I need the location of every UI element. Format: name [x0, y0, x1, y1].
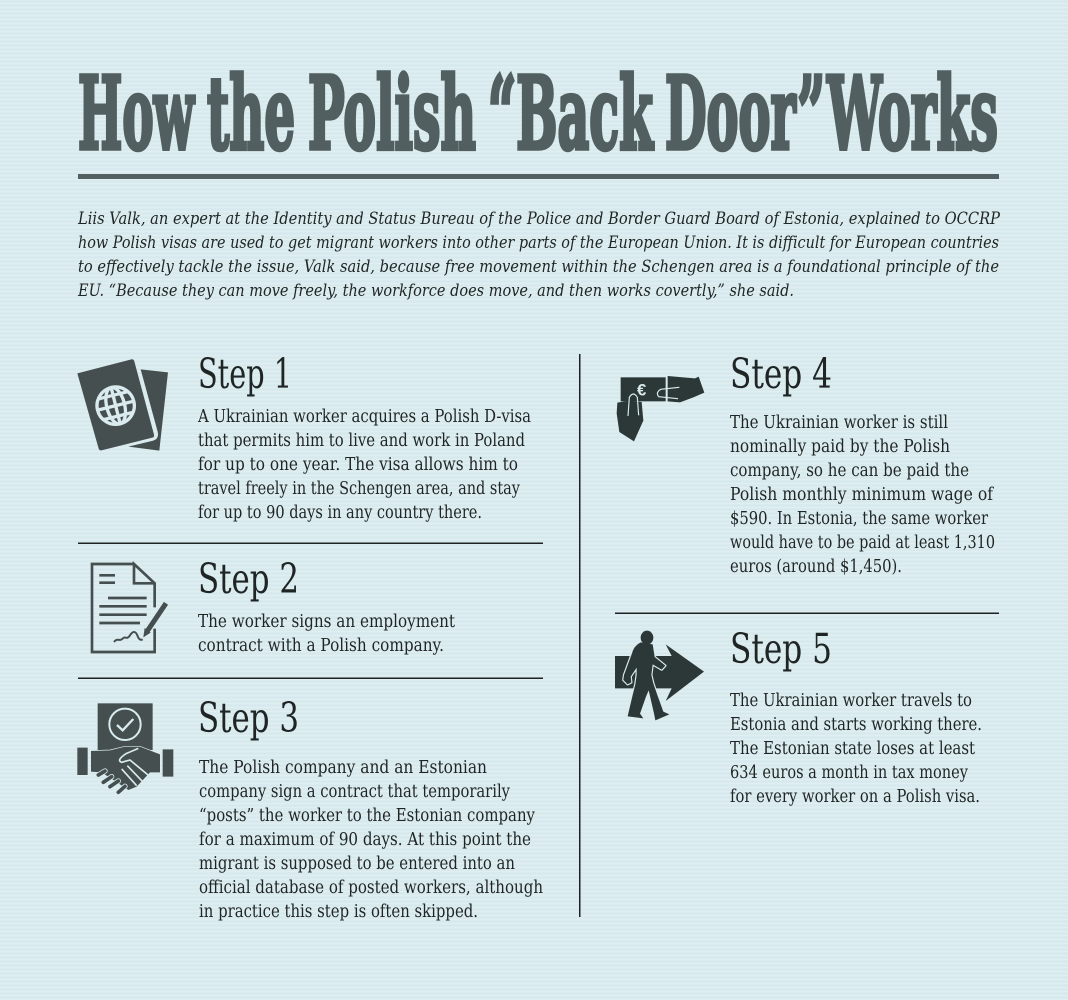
step 3: The Polish company and an Estonian: [199, 758, 487, 778]
icon: passport: [77, 359, 168, 451]
icon: person walking past arrow: [615, 631, 704, 720]
step 1: Step 1: [198, 350, 292, 398]
step divider 4-5: [615, 612, 999, 614]
step 3: for a maximum of 90 days. At this point the: [199, 830, 531, 850]
step 4: Polish monthly minimum wage of: [730, 485, 994, 505]
step 5: Step 5: [730, 625, 832, 673]
step 1: A Ukrainian worker acquires a Polish D-visa: [197, 407, 531, 427]
icon: handshake and approval: [77, 703, 173, 792]
step 2: [198, 555, 455, 656]
title: How: [78, 54, 195, 172]
step 5: [730, 625, 982, 807]
step 5: 634 euros a month in tax money: [730, 763, 968, 783]
step 3: company sign a contract that temporarily: [199, 782, 510, 802]
step 2: The worker signs an employment: [198, 612, 455, 632]
title: [78, 54, 998, 172]
step 3: Step 3: [198, 694, 299, 742]
step 3: official database of posted workers, although: [199, 878, 543, 898]
step 4: euros (around $1,450).: [730, 557, 902, 577]
step 1: travel freely in the Schengen area, and stay: [198, 479, 520, 499]
title: “Back: [488, 54, 654, 172]
step 4: [730, 350, 995, 577]
intro text: EU. “Because they can move freely, the workforce does move, and then works covertly,” she said.: [77, 281, 794, 301]
step 1: for up to 90 days in any country there.: [198, 503, 482, 523]
step 4: would have to be paid at least 1,310: [730, 533, 995, 553]
step 4: company, so he can be paid the: [730, 461, 969, 481]
title rule: [78, 174, 999, 179]
step divider 2-3: [78, 678, 543, 679]
step 2: contract with a Polish company.: [198, 636, 444, 656]
step 4: Step 4: [730, 350, 832, 398]
step 4: $590. In Estonia, the same worker: [730, 509, 989, 529]
step 4: The Ukrainian worker is still: [730, 413, 948, 433]
step 5: The Estonian state loses at least: [730, 739, 975, 759]
icon: hands exchanging euro note: €: [637, 380, 646, 399]
step 3: in practice this step is often skipped.: [199, 902, 478, 922]
icon: hands exchanging euro note: [617, 376, 704, 441]
title: Polish: [308, 54, 476, 172]
step 5: The Ukrainian worker travels to: [730, 691, 972, 711]
step 1: that permits him to live and work in Poland: [198, 431, 525, 451]
intro text: [77, 209, 1000, 301]
step 3: migrant is supposed to be entered into an: [199, 854, 515, 874]
step 2: Step 2: [198, 555, 299, 603]
title: the: [207, 54, 295, 172]
step 3: [198, 694, 543, 922]
step divider 1-2: [78, 542, 543, 544]
step 3: “posts” the worker to the Estonian company: [199, 806, 535, 826]
step 5: Estonia and starts working there.: [730, 715, 982, 735]
column divider: [579, 354, 580, 917]
icon: signed contract: [92, 564, 166, 652]
step 1: for up to one year. The visa allows him to: [198, 455, 518, 475]
step 5: for every worker on a Polish visa.: [730, 787, 980, 807]
step 4: nominally paid by the Polish: [730, 437, 950, 457]
title: Door”: [665, 54, 825, 172]
step 1: [197, 350, 531, 523]
